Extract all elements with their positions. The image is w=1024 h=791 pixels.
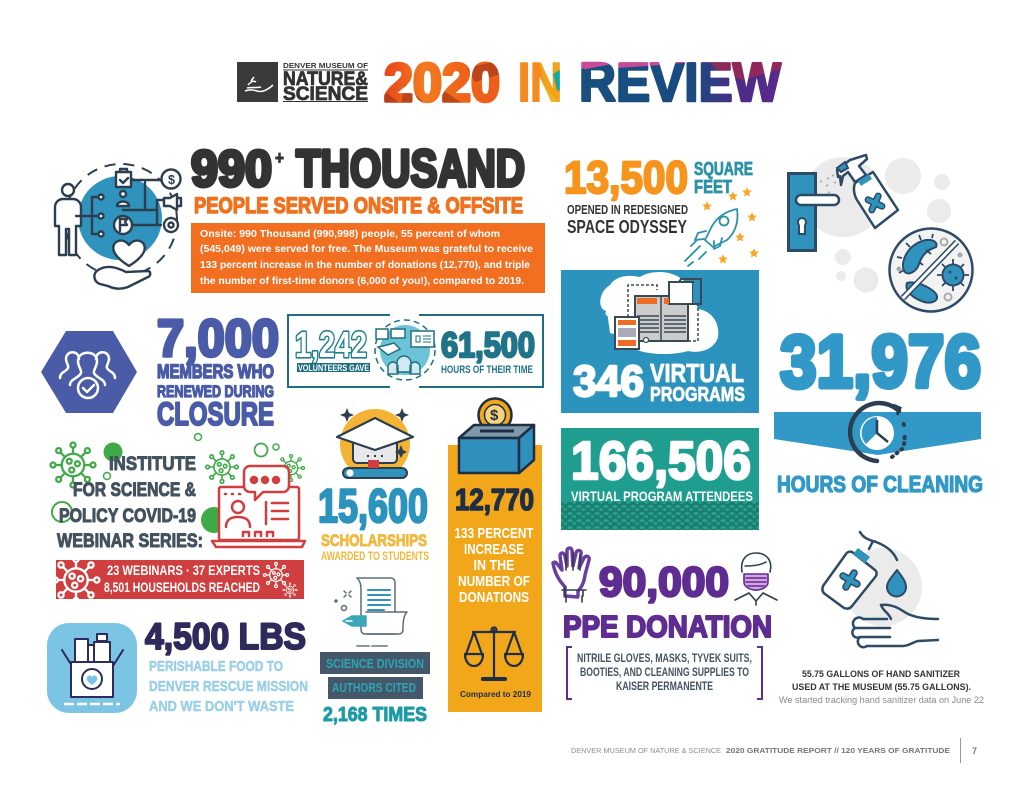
ppe details with brackets: BOOTIES, AND CLEANING SUPPLIES TO (580, 665, 749, 679)
icon: members hexagon (41, 331, 137, 413)
ppe details with brackets: NITRILE GLOVES, MASKS, TYVEK SUITS, (577, 651, 752, 665)
panel: webinar stats: 8,501 HOUSEHOLDS REACHED (104, 580, 260, 595)
stat: 7,000 members renewed (157, 310, 279, 432)
panel: onsite summary text: Onsite: 990 Thousand (990,998) people, 55 percent of whom (200, 229, 500, 240)
icon: hand sanitizer (822, 532, 938, 647)
donations description: NUMBER OF (458, 573, 530, 590)
stat: 12,770: 12,770 (455, 482, 534, 517)
title: 2020 in review: 2020 (384, 53, 500, 113)
webinar decorations: viruses and green dots (50, 434, 304, 533)
icon: nitrile glove (553, 548, 589, 602)
footer: DENVER MUSEUM OF NATURE & SCIENCE (571, 746, 721, 755)
museum logo: SCIENCE (283, 84, 368, 105)
stat: 346 virtual programs: PROGRAMS (650, 383, 745, 406)
icon: document and pen (335, 578, 407, 646)
heading: institute webinar series: FOR SCIENCE & (73, 479, 196, 501)
stat: 13,500 square feet: FEET (694, 177, 732, 197)
stat: 7,000 members renewed: RENEWED DURING (157, 383, 274, 401)
panel: donations: $ (490, 407, 499, 424)
stat: science division authors cited (320, 652, 430, 726)
donations description: INCREASE (464, 541, 524, 558)
food description: DENVER RESCUE MISSION (149, 678, 308, 695)
stat: 346 virtual programs: VIRTUAL (650, 360, 744, 388)
panel: onsite summary text: (545,049) were served for free. The Museum was grateful to receive (200, 244, 533, 255)
heading: institute webinar series: POLICY COVID-19 (59, 505, 196, 527)
footer: 7 (972, 746, 977, 756)
title: 2020 in review: REVIEW (579, 51, 781, 113)
stat: 13,500 square feet: 13,500 (564, 152, 688, 203)
stat: 7,000 members renewed: CLOSURE (157, 396, 274, 432)
icon: people served network: $ (168, 172, 176, 187)
stat: 31,976 hours of cleaning (774, 320, 983, 497)
panel: 166,506 attendees: VIRTUAL PROGRAM ATTENDEES (571, 488, 753, 504)
heading: institute webinar series: INSTITUTE (109, 453, 196, 475)
header: logo and title (237, 51, 781, 113)
food description: PERISHABLE FOOD TO (149, 658, 283, 675)
headline: 990+ thousand people served (191, 140, 525, 218)
stat: 15,600 scholarships: AWARDED TO STUDENTS (321, 551, 429, 563)
food description: AND WE DON'T WASTE (149, 698, 294, 715)
panel: onsite summary text: 133 percent increase in the number of donations (12,770), and triple (200, 260, 530, 271)
stat: 90,000 ppe donation (563, 558, 772, 644)
heading: institute webinar series (57, 453, 203, 552)
icon: laptop webinar (212, 466, 305, 547)
stat: science division authors cited: AUTHORS CITED (332, 681, 416, 695)
museum logo: DENVER MUSEUM OF (283, 61, 368, 70)
panel: onsite summary text (191, 223, 545, 293)
stat: 4,500 lbs (145, 616, 308, 715)
museum logo (237, 61, 368, 105)
donations description (454, 525, 534, 606)
donations description: IN THE (474, 557, 514, 574)
stat: science division authors cited: 2,168 TIMES (323, 703, 427, 726)
stat: 7,000 members renewed: MEMBERS WHO (157, 362, 274, 383)
panel: donations (448, 398, 542, 712)
stat: 31,976 hours of cleaning: 31,976 (780, 320, 981, 403)
stat: 90,000 ppe donation: 90,000 (599, 558, 729, 605)
icon: masked person (735, 553, 777, 605)
stat: 90,000 ppe donation: PPE DONATION (563, 609, 772, 644)
icon: food box (47, 623, 137, 713)
stat: science division authors cited: SCIENCE DIVISION (326, 657, 424, 671)
icon: virtual program pages (600, 272, 718, 354)
stat: 1,242 volunteers: 1,242 (295, 324, 367, 365)
headline: 990+ thousand people served: + (275, 148, 284, 168)
icon: donation box and coin (459, 398, 534, 473)
panel: volunteers (288, 315, 543, 387)
stat: 31,976 hours of cleaning: HOURS OF CLEANING (777, 471, 983, 497)
icon: no germs (890, 228, 972, 312)
donations description: 133 PERCENT (454, 525, 534, 542)
stat: 13,500 square feet: SQUARE (694, 159, 753, 179)
stat: 1,242 volunteers: VOLUNTEERS GAVE (298, 363, 369, 374)
text: hand sanitizer usage (779, 669, 984, 705)
panel: webinar stats (53, 557, 304, 603)
footer (571, 738, 977, 763)
panel: 166,506 attendees (561, 428, 759, 530)
stat: 4,500 lbs: 4,500 LBS (145, 616, 306, 657)
headline: 990+ thousand people served: 990 (191, 140, 272, 197)
ppe details with brackets (567, 647, 762, 699)
museum logo: NATURE& (283, 69, 368, 90)
stat: 61,500 hours: 61,500 (441, 326, 535, 365)
icon: door handle and spray (788, 155, 951, 292)
icon: people served network (55, 164, 181, 289)
icon: volunteers (375, 320, 435, 380)
stat: 15,600 scholarships: 15,600 (318, 479, 428, 532)
stat: 13,500 square feet: OPENED IN REDESIGNED (567, 203, 688, 217)
panel: 166,506 attendees: 166,506 (571, 431, 751, 491)
icon: graduation cap (337, 408, 413, 479)
stat: 13,500 square feet: SPACE ODYSSEY (567, 217, 687, 237)
ribbon with clock (774, 403, 981, 461)
footer: 2020 GRATITUDE REPORT // 120 YEARS OF GRATITUDE (726, 746, 950, 755)
ppe details with brackets: KAISER PERMANENTE (616, 679, 713, 693)
heading: institute webinar series: WEBINAR SERIES: (57, 530, 203, 552)
panel: webinar stats: 23 WEBINARS · 37 EXPERTS (107, 563, 260, 578)
panel: onsite summary text: the number of first-time donors (6,000 of you!), compared to 2019. (200, 276, 524, 287)
stat: 61,500 hours: HOURS OF THEIR TIME (441, 364, 533, 376)
subheading: PEOPLE SERVED ONSITE & OFFSITE (194, 193, 523, 218)
stat: 346 virtual programs: 346 (573, 357, 644, 406)
panel: 346 virtual programs (561, 270, 759, 413)
icon: rocket and stars (685, 187, 759, 266)
stat: 15,600 scholarships: SCHOLARSHIPS (321, 531, 427, 550)
stat: 13,500 square feet (564, 152, 753, 237)
compared to 2019: Compared to 2019 (460, 689, 531, 699)
title: 2020 in review: IN (518, 51, 562, 113)
icon: balance scale (465, 628, 523, 679)
food description (149, 658, 308, 715)
text: hand sanitizer usage: 55.75 GALLONS OF HAND SANITIZER (802, 669, 960, 680)
stat: 7,000 members renewed: 7,000 (157, 310, 279, 368)
stat: 346 virtual programs (573, 357, 745, 406)
donations description: DONATIONS (459, 589, 529, 606)
text: hand sanitizer usage: We started tracking hand sanitizer data on June 22 (779, 695, 984, 705)
title: 2020 in review (384, 51, 781, 113)
text: hand sanitizer usage: USED AT THE MUSEUM (55.75 GALLONS). (792, 682, 971, 693)
headline: 990+ thousand people served: THOUSAND (296, 140, 525, 198)
stat: 15,600 scholarships (318, 479, 429, 563)
